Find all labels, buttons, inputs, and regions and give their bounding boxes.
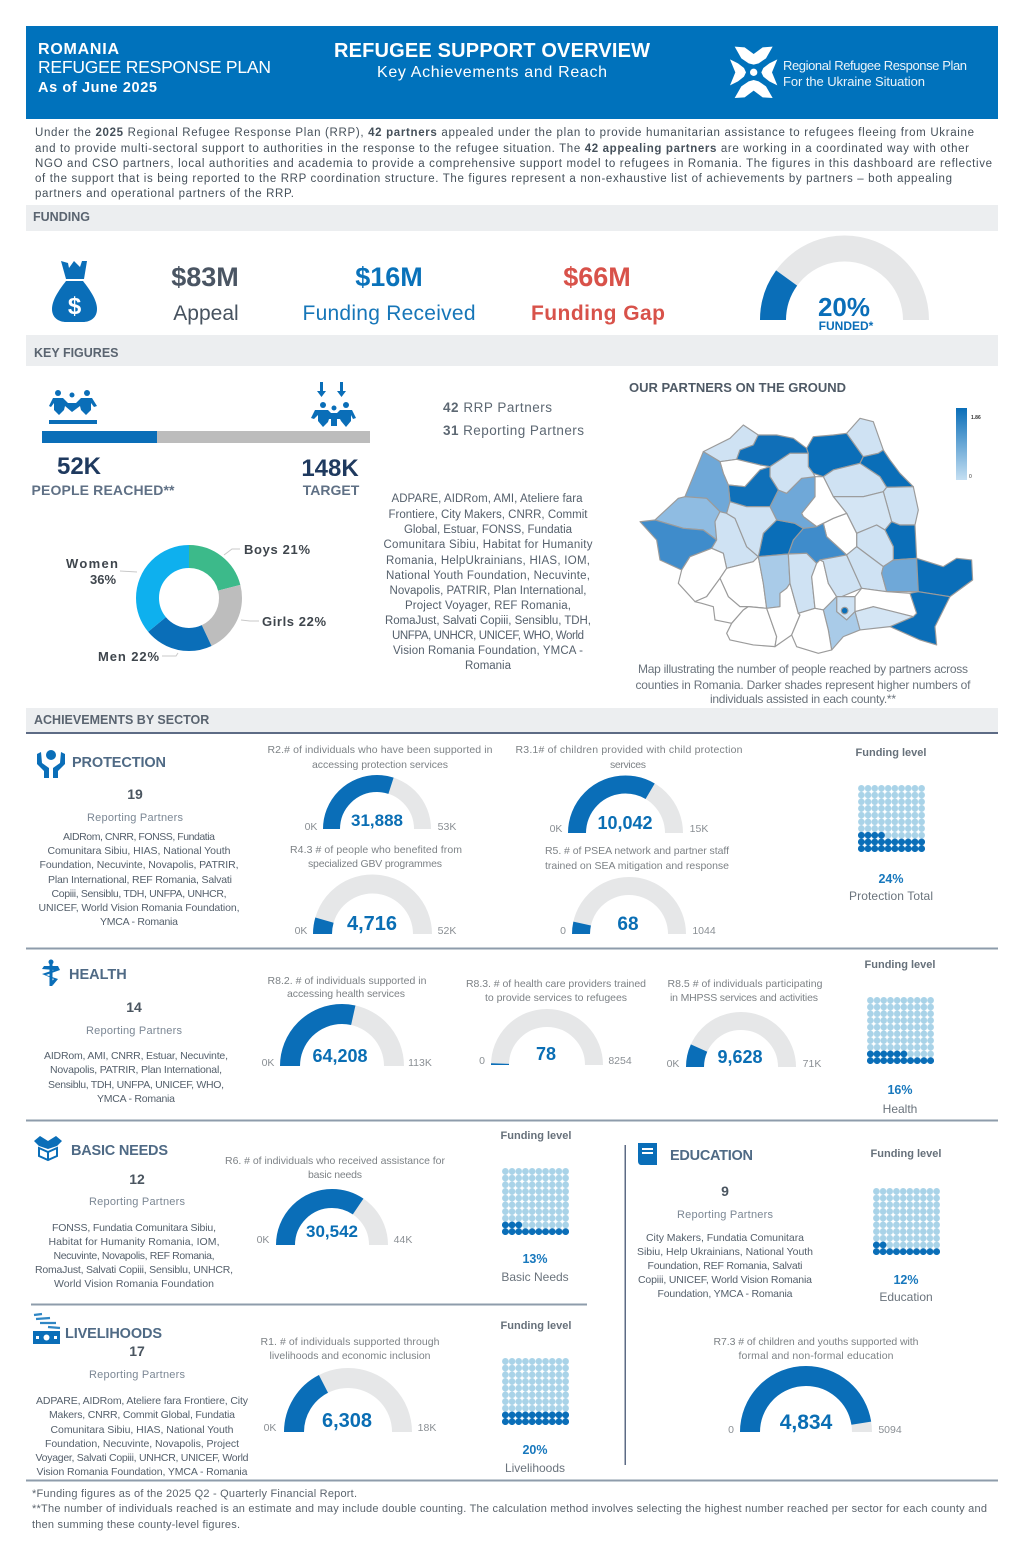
icon: target people [311,382,356,427]
gauge: R7.3: 0 [728,1424,734,1436]
gauge: R8.2: R8.2. # of individuals supported in [268,975,427,987]
gauge: R6: 30,542 [306,1222,358,1241]
basic needs partners: World Vision Romania Foundation [54,1278,214,1290]
gauge: R7.3: formal and non-formal education [738,1350,894,1362]
gauge: R1: 18K [418,1422,436,1434]
gauge: R7.3: 5094 [878,1424,902,1436]
livelihoods partners: Foundation, Necuvinte, Novapolis, Project [45,1438,239,1450]
education partners: 9 [721,1183,729,1199]
partner list: Novapolis, PATRIR, Plan International, [390,585,586,597]
target: 148K [301,455,359,482]
basic needs partners: Necuvinte, Novapolis, REF Romania, [54,1250,214,1262]
funding: appeal [171,262,239,325]
health partners: YMCA - Romania [97,1093,175,1105]
protection partners: YMCA - Romania [100,916,178,928]
gauge: R8.3: 78 [536,1044,556,1064]
funding: gap: Funding Gap [531,302,665,325]
protection partners: 19 [127,786,143,802]
partner list [384,493,593,672]
intro paragraph: Under the 2025 Regional Refugee Response Plan (RRP), 42 partners appealed under the plan to provide humanitarian assistance to refugees fleeing from Ukraine [35,127,974,139]
icon: book [638,1143,657,1165]
partner list: Frontiere, City Makers, CNRR, Commit [388,509,588,521]
gauge: 20% funded: 20% [818,292,870,322]
gauge: R8.5: 9,628 [717,1047,763,1067]
panel: health [42,959,935,1116]
partner list: Global, Estuar, FONSS, Fundatia [404,524,573,536]
donut chart: demographics: Women [66,556,118,571]
header: country and plan: As of June 2025 [38,80,157,96]
gauge: R8.2: 113K [408,1057,432,1069]
icon: people reached [49,390,97,424]
gauge: R5: 0 [560,925,566,937]
partner list: UNFPA, UNHCR, UNICEF, WHO, World [392,630,584,642]
gauge: R6: basic needs [308,1169,362,1181]
map title: OUR PARTNERS ON THE GROUND [629,380,846,395]
header: RRP name: Regional Refugee Response Plan [783,58,967,73]
section band: funding: FUNDING [33,210,90,224]
header: country and plan: REFUGEE RESPONSE PLAN [38,57,271,77]
icon: RRP logo [730,47,777,98]
gauge: R1: livelihoods and economic inclusion [270,1350,431,1362]
gauge: R8.3: to provide services to refugees [485,992,627,1004]
gauge: R8.5: in MHPSS services and activities [670,992,818,1004]
gauge: R7.3 [714,1336,919,1436]
basic needs partners: Reporting Partners [89,1196,186,1208]
section band: key figures [26,335,998,366]
gauge: R2: 0K [305,821,317,833]
funding: received: $16M [355,262,423,292]
gauge: R3.1: 10,042 [597,813,653,833]
partner list: ADPARE, AIDRom, AMI, Ateliere fara [392,493,583,505]
gauge: R4.3 [290,844,462,937]
section band: funding [26,205,998,231]
protection partners: Reporting Partners [87,812,184,824]
gauge: R6: R6. # of individuals who received assistance for [225,1155,446,1167]
gauge: R4.3: specialized GBV programmes [308,858,442,870]
education partners: Sibiu, Help Ukrainians, National Youth [637,1246,813,1258]
funding: gap: $66M [563,262,631,292]
header: RRP name [783,58,967,89]
target [301,455,360,498]
livelihoods partners: Vision Romania Foundation, YMCA - Romania [36,1466,248,1478]
divider [26,1480,998,1482]
donut chart: demographics: Boys 21% [244,542,310,557]
gauge: R7.3: R7.3 # of children and youths supported with [714,1336,919,1348]
gauge: R5 [545,845,729,937]
funding: received: Funding Received [302,302,476,325]
funding: appeal: $83M [171,262,239,292]
health partners: AIDRom, AMI, CNRR, Estuar, Necuvinte, [44,1050,228,1062]
gauge: R4.3: 52K [438,925,456,937]
gauge: R8.2: 64,208 [312,1046,368,1066]
donut chart: demographics: Girls 22% [262,614,326,629]
education partners: Foundation, REF Romania, Salvati [648,1260,802,1272]
gauge: R8.3: 8254 [608,1055,632,1067]
waffle: livelihoods funding 20%: 20% [522,1443,548,1457]
gauge: R5: trained on SEA mitigation and response [545,860,729,872]
waffle: health funding 16%: 16% [887,1083,913,1097]
waffle: basic needs funding 13% [501,1130,571,1284]
gauge: R5: 68 [617,914,639,935]
protection partners: UNICEF, World Vision Romania Foundation, [38,902,240,914]
gauge: R1: 0K [264,1422,276,1434]
partner list: Romania, HelpUkrainians, HIAS, IOM, [386,555,590,567]
gauge: 20% funded: FUNDED* [819,319,874,333]
gauge: R8.5: 0K [667,1058,679,1070]
people reached: PEOPLE REACHED** [32,482,175,498]
map caption: individuals assisted in each county.** [710,692,896,706]
icon: open box [34,1136,62,1160]
basic needs partners [35,1171,233,1290]
gauge: R3.1: R3.1# of children provided with child protection [516,744,743,756]
gauge: R8.5 [667,978,823,1070]
partner list: RomaJust, Salvati Copiii, Sensiblu, TDH, [385,615,591,627]
protection partners: Copiii, Sensiblu, TDH, UNFPA, UNHCR, [52,888,226,900]
education partners: Copiii, UNICEF, World Vision Romania [638,1274,812,1286]
intro paragraph: partners and operational partners of the RRP. [35,188,294,200]
gauge: R6: 44K [394,1234,412,1246]
intro paragraph [35,127,992,200]
heading: education: EDUCATION [670,1148,753,1164]
intro paragraph: of the support that is being reported to the RRP coordination structure. The figures represent a non-exhaustive list of achievements by partners – both appealing [35,173,952,185]
gauge: R8.3: R8.3. # of health care providers trained [466,978,646,990]
waffle: health funding 16%: Funding level [865,959,935,971]
gauge: R8.3 [466,978,646,1067]
gauge: R3.1: services [610,759,646,771]
gauge: R8.5: 71K [803,1058,821,1070]
education partners: City Makers, Fundatia Comunitara [646,1232,804,1244]
icon: money bag [52,261,97,322]
gauge: R6 [225,1155,446,1246]
partner list: Vision Romania Foundation, YMCA - [393,645,583,657]
gauge: 20% funded [773,248,916,333]
section band: achievements by sector [26,708,998,734]
panel: livelihoods [33,1314,571,1478]
waffle: basic needs funding 13%: Basic Needs [501,1270,569,1284]
heading: livelihoods: LIVELIHOODS [65,1326,162,1342]
footnotes: **The number of individuals reached is an estimate and may include double counting. The calculation method involves selecting the highest number reached per sector for each county and [32,1503,987,1515]
gauge: R5: 1044 [692,925,716,937]
gauge: R2: R2.# of individuals who have been supported in [268,744,493,756]
gauge: R8.2: 0K [262,1057,274,1069]
footnotes: then summing these county-level figures. [32,1519,240,1531]
map legend: 1.86 [971,415,981,421]
livelihoods partners [36,1343,249,1478]
gauge: R1 [260,1336,440,1434]
education partners [637,1183,813,1300]
footnotes: *Funding figures as of the 2025 Q2 - Quarterly Financial Report. [32,1488,357,1500]
partner list: Project Voyager, REF Romania, [405,600,571,612]
basic needs partners: RomaJust, Salvati Copiii, Sensiblu, UNHCR, [35,1264,233,1276]
waffle: health funding 16% [865,959,935,1116]
donut chart: demographics [66,542,326,664]
waffle: protection funding 24%: Protection Total [849,889,933,903]
divider [26,1120,998,1122]
protection partners: Foundation, Necuvinte, Novapolis, PATRIR, [40,859,238,871]
protection partners: AIDRom, CNRR, FONSS, Fundatia [63,831,215,843]
icon: livelihoods hand and banknote [33,1314,60,1344]
header: country and plan: ROMANIA [38,41,119,58]
gauge: R5: R5. # of PSEA network and partner staff [545,845,729,857]
gauge: R8.2: accessing health services [287,988,405,1000]
waffle: livelihoods funding 20%: Funding level [501,1320,571,1332]
header banner [26,26,998,119]
waffle: protection funding 24% [849,747,933,903]
gauge: R8.5: R8.5 # of individuals participating [668,978,823,990]
gauge: R1: R1. # of individuals supported through [260,1336,440,1348]
map caption: Map illustrating the number of people reached by partners across [638,662,968,676]
gauge: R3.1 [516,744,743,835]
donut chart: demographics: 36% [90,572,116,587]
gauge: R3.1: 0K [550,823,562,835]
gauge: R8.3: 0 [479,1055,485,1067]
gauge: R2: accessing protection services [312,759,448,771]
education partners: Reporting Partners [677,1209,774,1221]
header: RRP name: For the Ukraine Situation [783,74,925,89]
panel: basic needs [34,1130,571,1290]
gauge: R2 [268,744,493,833]
funding: appeal: Appeal [173,302,239,325]
section band: achievements by sector: ACHIEVEMENTS BY SECTOR [34,713,209,727]
waffle: protection funding 24%: Funding level [856,747,926,759]
icon: money bag: $ [68,293,82,320]
partner counts: 42 RRP Partners [443,400,552,415]
livelihoods partners: Comunitara Sibiu, HIAS, National Youth [50,1424,234,1436]
livelihoods partners: Makers, CNRR, Commit Global, Fundatia [49,1409,235,1421]
livelihoods partners: Reporting Partners [89,1369,186,1381]
livelihoods partners: 17 [129,1343,145,1359]
gauge: R3.1: 15K [690,823,708,835]
gauge: R8.2 [262,975,432,1069]
gauge: R7.3: 4,834 [780,1411,833,1434]
header: title: Key Achievements and Reach [377,64,607,81]
map legend [956,408,981,480]
progress bar [42,431,370,443]
gauge: R2: 53K [438,821,456,833]
target: TARGET [303,482,360,498]
gauge: R4.3: R4.3 # of people who benefited from [290,844,462,856]
vertical divider [624,1145,626,1465]
waffle: education funding 12%: Funding level [871,1148,941,1160]
choropleth map of Romania [640,418,973,653]
panel: protection [37,744,933,937]
gauge: R4.3: 4,716 [347,913,397,935]
protection partners: Plan International, REF Romania, Salvati [48,874,232,886]
waffle: education funding 12%: Education [879,1290,933,1304]
header: title [334,40,650,81]
heading: basic needs: BASIC NEEDS [71,1143,168,1159]
partner counts: 31 Reporting Partners [443,423,584,438]
heading: health: HEALTH [69,967,127,983]
education partners: Foundation, YMCA - Romania [658,1288,793,1300]
livelihoods partners: Voyager, Salvati Copiii, UNHCR, UNICEF, World [36,1452,249,1464]
heading: protection: PROTECTION [72,755,166,771]
map caption: counties in Romania. Darker shades represent higher numbers of [636,678,971,692]
basic needs partners: FONSS, Fundatia Comunitara Sibiu, [52,1222,216,1234]
protection partners [38,786,240,928]
waffle: livelihoods funding 20% [501,1320,571,1475]
gauge: R4.3: 0K [295,925,307,937]
icon: health caduceus [42,960,60,986]
waffle: protection funding 24%: 24% [878,872,904,886]
partner list: Comunitara Sibiu, Habitat for Humanity [384,539,593,551]
waffle: education funding 12% [871,1148,941,1304]
livelihoods partners: ADPARE, AIDRom, Ateliere fara Frontiere, City [36,1395,249,1407]
header: country and plan [38,41,271,96]
waffle: basic needs funding 13%: Funding level [501,1130,571,1142]
funding: gap [531,262,665,325]
health partners [44,999,228,1105]
footnotes [32,1488,987,1531]
health partners: Novapolis, PATRIR, Plan International, [50,1064,222,1076]
donut chart: demographics: Men 22% [98,649,159,664]
gauge: R2: 31,888 [351,811,403,830]
partner counts [443,400,584,438]
section band: key figures: KEY FIGURES [34,346,119,360]
basic needs partners: 12 [129,1171,145,1187]
waffle: basic needs funding 13%: 13% [522,1252,548,1266]
health partners: Reporting Partners [86,1025,182,1037]
waffle: health funding 16%: Health [883,1102,917,1116]
intro paragraph: NGO and CSO partners, local authorities and academia to provide a comprehensive support model to refugees in Romania. The figures in this dashboard are reflective [35,158,992,170]
partner list: Romania [465,660,512,672]
gauge: R6: 0K [257,1234,269,1246]
funding: received [302,262,476,325]
protection partners: Comunitara Sibiu, HIAS, National Youth [48,845,231,857]
health partners: Sensiblu, TDH, UNFPA, UNICEF, WHO, [48,1079,224,1091]
panel: education [637,1143,941,1436]
intro paragraph: and to provide multi-sectoral support to authorities in the response to the refugee situation. The 42 appealing partners are working in a coordinated way with other [35,143,969,155]
health partners: 14 [126,999,142,1015]
divider [31,1304,587,1306]
header: title: REFUGEE SUPPORT OVERVIEW [334,40,650,62]
divider [26,948,998,950]
people reached: 52K [57,453,102,480]
basic needs partners: Habitat for Humanity Romania, IOM, [48,1236,220,1248]
icon: protection hands [37,750,65,778]
people reached [32,453,175,498]
map legend: 0 [969,474,972,480]
partner list: National Youth Foundation, Necuvinte, [386,570,590,582]
gauge: R1: 6,308 [322,1410,372,1432]
map caption [636,662,971,706]
waffle: livelihoods funding 20%: Livelihoods [505,1461,565,1475]
waffle: education funding 12%: 12% [893,1273,919,1287]
